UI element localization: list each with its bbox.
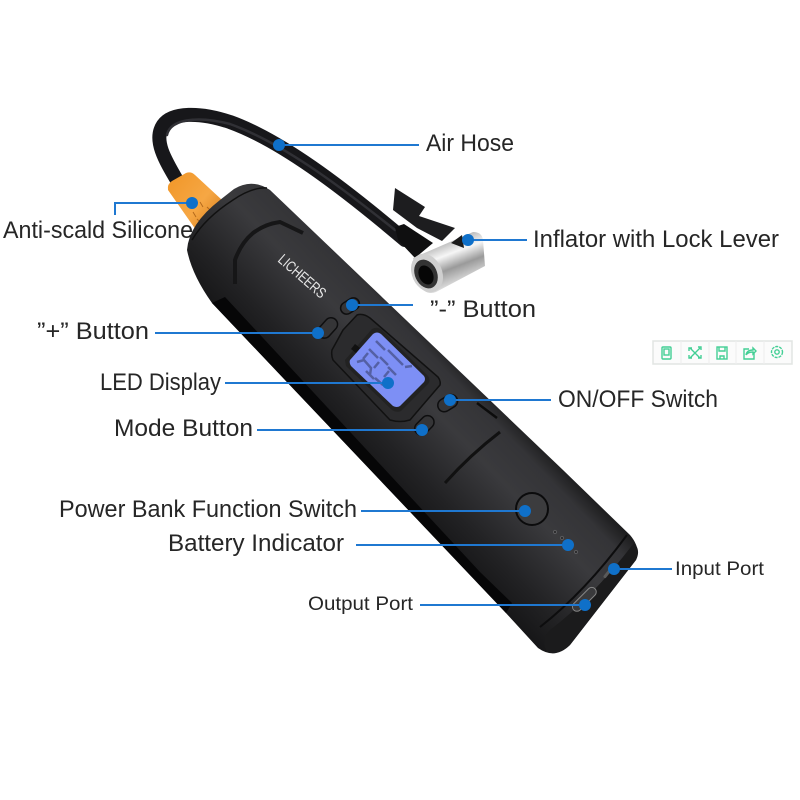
icon: settings <box>772 346 782 358</box>
air hose <box>159 115 405 240</box>
LCD screen <box>345 328 430 412</box>
leader lines and dots <box>115 145 672 605</box>
label: on/off: ON/OFF Switch <box>558 386 718 413</box>
shoulder groove <box>235 222 303 284</box>
label: mode: Mode Button <box>114 415 253 442</box>
toolbar <box>653 341 792 364</box>
inflator with lever <box>393 188 485 297</box>
label: air hose: Air Hose <box>426 130 514 157</box>
power switch button <box>516 493 548 525</box>
label: output: Output Port <box>308 594 414 615</box>
label: battery: Battery Indicator <box>168 530 344 557</box>
output port <box>571 586 598 613</box>
display bezel <box>332 314 440 422</box>
icon: share <box>744 348 756 359</box>
label: power bank: Power Bank Function Switch <box>59 496 357 523</box>
label: input: Input Port <box>675 559 765 580</box>
cap seam <box>192 188 267 240</box>
label: display: LED Display <box>100 369 221 396</box>
label: plus: ”+” Button <box>37 318 149 345</box>
labels <box>3 130 779 615</box>
brand logo: LICHEERS <box>274 251 329 302</box>
side vent slot <box>212 297 512 613</box>
icon: save <box>717 347 727 359</box>
input port <box>603 563 616 579</box>
label: inflator: Inflator with Lock Lever <box>533 226 779 253</box>
end face <box>544 543 638 653</box>
pump body <box>187 184 638 653</box>
silicone sleeve <box>168 172 222 230</box>
buttons <box>315 296 460 438</box>
label: minus: ”-” Button <box>430 296 536 323</box>
icon: expand <box>689 347 701 358</box>
label: silicone: Anti-scald Silicone <box>3 217 193 244</box>
lower body seam <box>445 432 500 483</box>
battery LEDs <box>553 530 578 554</box>
icon: tablet <box>662 347 671 359</box>
